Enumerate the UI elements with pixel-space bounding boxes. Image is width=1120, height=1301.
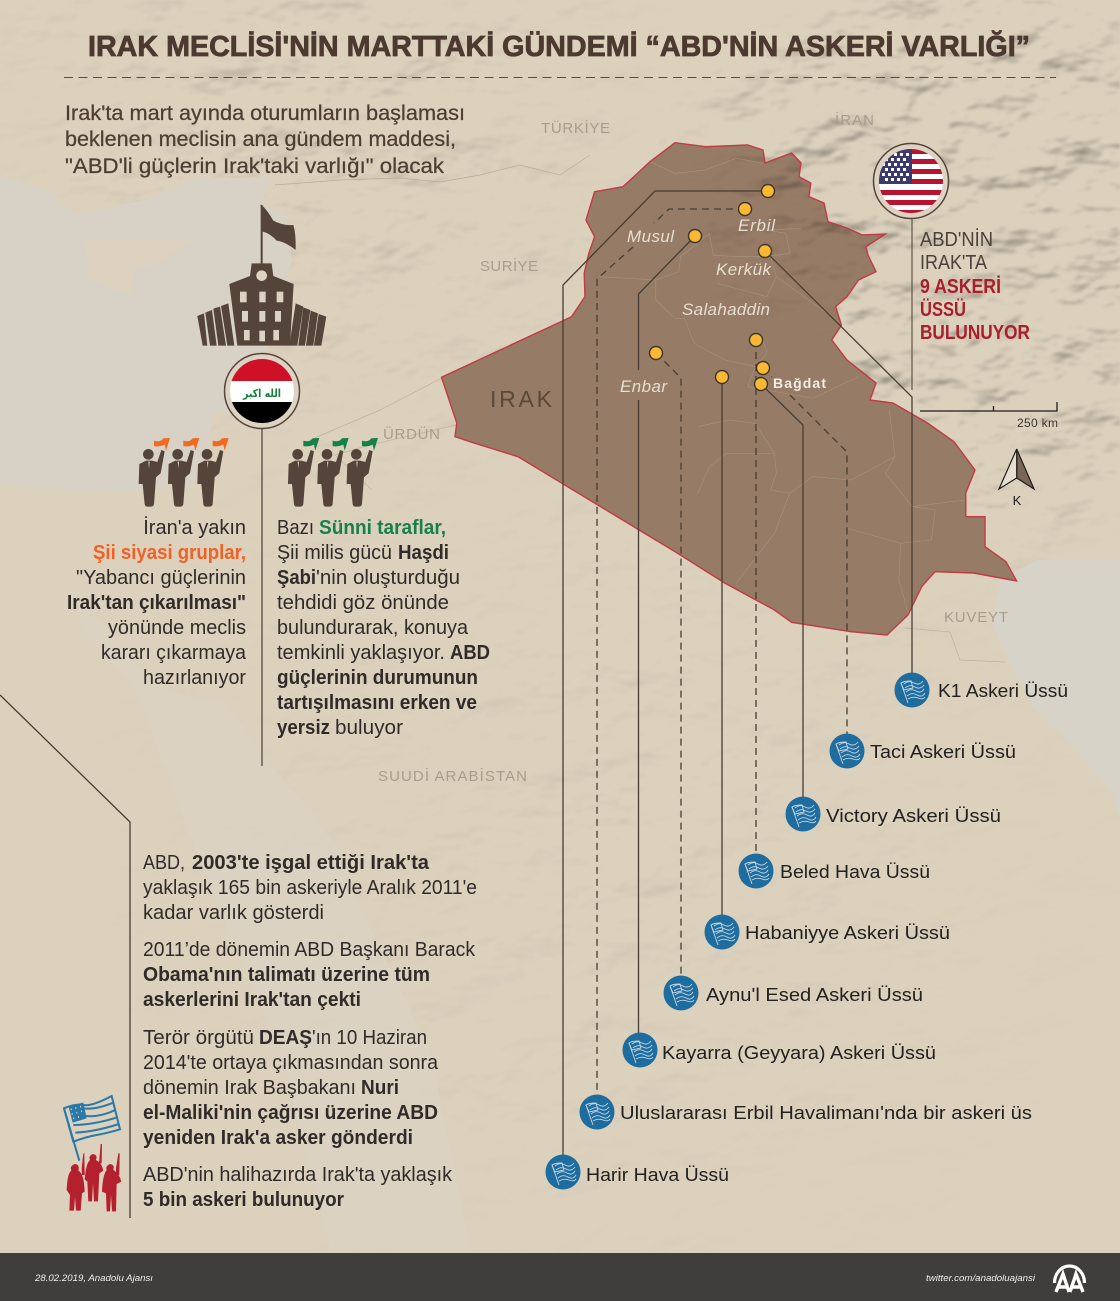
text: 9 bases: ÜSSÜ: [920, 298, 966, 321]
text: 9 bases: BULUNUYOR: [920, 322, 1030, 344]
footer: 28.02.2019, Anadolu Ajansı: [34, 1273, 153, 1284]
text: history: 5 bin askeri bulunuyor: [143, 1189, 344, 1211]
map labels: Musul: [627, 227, 675, 246]
icon: soldiers: [67, 1144, 121, 1211]
map labels: Bağdat: [773, 375, 826, 391]
text: history: [143, 852, 477, 1211]
text: history: 2003'te işgal ettiği Irak'ta: [192, 852, 430, 874]
text: Sunni groups: Sünni taraflar,: [319, 517, 446, 539]
text: history: dönemin Irak Başbakanı: [143, 1077, 356, 1099]
map labels: [490, 216, 826, 412]
text: Shia groups: Şii siyasi gruplar,: [93, 542, 246, 564]
text: Shia groups: yönünde meclis: [108, 617, 246, 639]
map labels: Erbil: [738, 216, 776, 235]
country labels: İRAN: [835, 111, 874, 129]
footer: twitter.com/anadoluajansi: [926, 1273, 1036, 1284]
country labels: KUVEYT: [944, 609, 1008, 626]
location dots: [650, 184, 774, 390]
country labels: TÜRKİYE: [541, 119, 610, 137]
text: history: kadar varlık gösterdi: [143, 902, 324, 924]
text: Sunni groups: Şii milis gücü: [277, 542, 392, 564]
intro text: [65, 102, 465, 178]
country labels: ÜRDÜN: [383, 425, 440, 443]
icon: parliament building: [197, 204, 326, 346]
base: Victory: [786, 796, 1001, 832]
map labels: IRAK: [490, 386, 553, 412]
base: Habaniyye: [704, 914, 950, 950]
text: Sunni groups: temkinli yaklaşıyor.: [277, 642, 445, 664]
base: Aynu'l Esed: [664, 976, 923, 1010]
icon: US flag: [874, 144, 948, 218]
base: Taci: [830, 734, 1016, 768]
base: Beled: Beled Hava Üssü: [780, 861, 930, 882]
intro text: beklenen meclisin ana gündem maddesi,: [65, 128, 456, 151]
text: history: ABD'nin halihazırda Irak'ta yaklaşık: [143, 1164, 453, 1186]
map labels: Salahaddin: [682, 300, 770, 319]
text: Shia groups: [67, 516, 247, 689]
icon: green flag holders: [288, 438, 378, 507]
map: Iraq: [440, 142, 1018, 636]
text: history: yeniden Irak'a asker gönderdi: [143, 1127, 413, 1149]
base: Harir: Harir Hava Üssü: [586, 1164, 729, 1185]
map labels: Kerkük: [716, 260, 772, 279]
intro text: "ABD'li güçlerin Irak'taki varlığı" olacak: [65, 155, 445, 178]
text: history: 2014'te ortaya çıkmasından sonra: [143, 1052, 439, 1074]
country labels: SUUDİ ARABİSTAN: [378, 767, 527, 785]
title: IRAK MECLİSİ'NİN MARTTAKİ GÜNDEMİ “ABD'NİN ASKERİ VARLIĞI”: [88, 29, 1030, 63]
connector lines: [563, 191, 912, 1156]
footer: [0, 1253, 1120, 1301]
north arrow: K: [1013, 493, 1022, 508]
text: 9 bases: 9 ASKERİ: [920, 275, 1001, 298]
base: Beled: [738, 854, 930, 888]
base: Kayarra: Kayarra (Geyyara) Askeri Üssü: [662, 1042, 936, 1063]
base: K1: [894, 672, 1068, 708]
icon: orange flag holders: [139, 438, 229, 507]
text: history: DEAŞ: [259, 1027, 312, 1049]
icon: Iraq flag: [224, 354, 300, 428]
text: Shia groups: "Yabancı güçlerinin: [76, 567, 246, 589]
text: Sunni groups: Bazı: [277, 517, 314, 539]
scale bar: [920, 402, 1058, 430]
base: Erbil: Uluslararası Erbil Havalimanı'nda bir askeri üs: [620, 1102, 1032, 1123]
country labels: [378, 111, 1008, 785]
text: history: Obama'nın talimatı üzerine tüm: [143, 964, 430, 986]
base: Erbil: [580, 1094, 1032, 1130]
text: Shia groups: hazırlanıyor: [143, 667, 246, 689]
icon: blue flag: [64, 1096, 120, 1161]
icon: Iraq flag: الله اكبر: [242, 387, 281, 400]
scale bar: 250 km: [1017, 416, 1058, 430]
text: history: Terör örgütü: [143, 1027, 254, 1049]
text: Shia groups: Irak'tan çıkarılması": [67, 592, 246, 614]
text: Sunni groups: güçlerinin durumunun: [277, 667, 478, 689]
text: 9 bases: ABD'NİN: [920, 228, 993, 251]
text: history: 'ın 10 Haziran: [312, 1027, 427, 1049]
intro text: Irak'ta mart ayında oturumların başlaması: [65, 102, 465, 125]
text: 9 bases: IRAK'TA: [920, 252, 988, 274]
base: Aynu'l Esed: Aynu'l Esed Askeri Üssü: [706, 984, 923, 1005]
text: Shia groups: İran'a yakın: [143, 516, 246, 539]
text: Sunni groups: ABD: [450, 642, 490, 664]
text: history: Nuri: [361, 1077, 399, 1099]
text: history: yaklaşık 165 bin askeriyle Aralık 2011'e: [143, 877, 477, 899]
text: history: 2011’de dönemin ABD Başkanı Barack: [143, 939, 476, 961]
text: Shia groups: kararı çıkarmaya: [101, 642, 247, 664]
base: Victory: Victory Askeri Üssü: [826, 805, 1001, 826]
base: Habaniyye: Habaniyye Askeri Üssü: [745, 922, 950, 943]
map background: [0, 0, 1120, 896]
base: Harir: [546, 1154, 729, 1190]
text: Sunni groups: Şabi: [277, 567, 316, 589]
text: history: ABD,: [143, 852, 185, 874]
text: Sunni groups: [277, 517, 490, 739]
north arrow: [999, 449, 1034, 508]
country labels: SURİYE: [480, 257, 538, 275]
map labels: Enbar: [620, 377, 668, 396]
text: history: askerlerini Irak'tan çekti: [143, 989, 361, 1011]
base: Kayarra: [622, 1032, 936, 1068]
icon: AA logo: [1054, 1266, 1084, 1292]
text: Sunni groups: tartışılmasını erken ve: [277, 692, 477, 714]
text: Sunni groups: yersiz: [277, 717, 330, 739]
text: history: el-Maliki'nin çağrısı üzerine ABD: [143, 1102, 438, 1124]
text: Sunni groups: tehdidi göz önünde: [277, 592, 449, 614]
text: 9 bases: [920, 228, 1030, 344]
text: Sunni groups: buluyor: [335, 717, 403, 739]
text: Sunni groups: 'nin oluşturduğu: [316, 567, 460, 589]
text: Sunni groups: bulundurarak, konuya: [277, 617, 469, 639]
base: K1: K1 Askeri Üssü: [938, 680, 1068, 701]
base: Taci: Taci Askeri Üssü: [870, 741, 1016, 762]
text: Sunni groups: Haşdi: [398, 542, 449, 564]
base list: [546, 672, 1068, 1190]
